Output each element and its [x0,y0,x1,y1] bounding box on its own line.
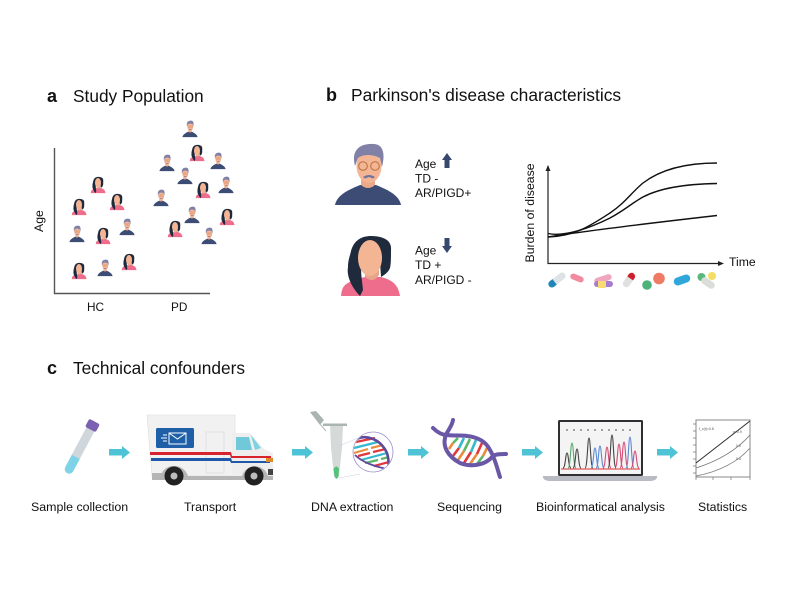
axis label: HC: HC [87,300,105,314]
axis label: Burden of disease: Burden of disease [523,163,537,262]
chart: statistics plot: p=0.9 [733,430,742,434]
panel: study population [32,86,234,314]
text: younger phenotype: AR/PIGD - [415,273,472,287]
icons: medication row [547,271,716,290]
text: older phenotype: TD - [415,172,438,186]
panel: technical confounders [31,358,750,514]
label: Statistics: Statistics [698,500,747,514]
icon: up arrow [442,153,452,168]
heading: a Study Population: a [47,86,58,106]
axis label: Time: Time [729,255,756,269]
chart: statistics plot: 0.5 [736,444,741,448]
arrow 4 [522,446,543,459]
scatter: people icons [69,121,234,279]
icon: DNA extraction tube [310,411,393,479]
label: DNA extraction: DNA extraction [311,500,393,514]
arrow 2 [292,446,313,459]
icon: laptop chromatogram [543,420,657,481]
heading: b Parkinson's disease characteristics: b [326,85,337,105]
label: Sample collection: Sample collection [31,500,128,514]
icon: mail truck [147,415,273,486]
icon: down arrow [442,238,452,253]
icon: sample tube [62,419,100,476]
label: Bioinformatical analysis: Bioinformatical analysis [536,500,665,514]
heading: b Parkinson's disease characteristics: Parkinson's disease characteristics [351,85,621,105]
axis label: Age: Age [32,210,46,232]
scatter axes [54,148,210,294]
text: older phenotype: Age [415,157,437,171]
text: younger phenotype: Age [415,244,437,258]
heading: c Technical confounders: Technical confounders [73,358,245,378]
text: older phenotype: AR/PIGD+ [415,186,471,200]
icon: older man [335,144,401,205]
icon: DNA helix [433,420,506,477]
icon: younger woman [341,236,400,296]
chart: statistics plot [693,420,750,480]
heading: a Study Population: Study Population [73,86,204,106]
label: Transport: Transport [184,500,237,514]
text: younger phenotype: TD + [415,258,441,272]
chart: statistics plot: f_c(t)=0.8 [699,427,714,431]
chart: statistics plot: 0.4 [736,457,741,461]
heading: c Technical confounders: c [47,358,57,378]
arrow 1 [109,446,130,459]
axis label: PD: PD [171,300,187,314]
panel: Parkinson's disease characteristics [326,85,756,296]
arrow 3 [408,446,429,459]
arrow 5 [657,446,678,459]
label: Sequencing: Sequencing [437,500,502,514]
chart: burden of disease over time [523,163,756,269]
